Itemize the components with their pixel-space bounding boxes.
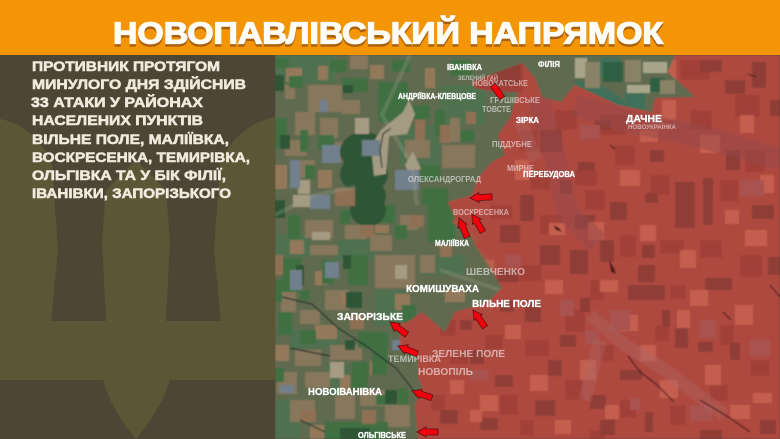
label: Новопіль: НОВОПІЛЬ [418, 367, 473, 378]
label: Товсте: ТОВСТЕ [482, 104, 511, 114]
label: Зелений Гай: ЗЕЛЕНИЙ ГАЙ [458, 74, 498, 82]
label: Вільне Поле: ВІЛЬНЕ ПОЛЕ [472, 299, 541, 310]
text block: attack summary [31, 59, 250, 201]
arrow: Олександроград direction [470, 192, 492, 203]
label: Новохатське: НОВОХАТСЬКЕ [472, 78, 528, 88]
label: Комишуваха: КОМИШУВАХА [406, 284, 479, 295]
label: Запорізьке: ЗАПОРІЗЬКЕ [337, 312, 403, 323]
header banner [0, 0, 780, 55]
label: Темирівка: ТЕМИРІВКА [388, 354, 441, 364]
label: Грушівське: ГРУШІВСЬКЕ [490, 95, 540, 105]
title: НОВОПАВЛІВСЬКИЙ НАПРЯМОК [113, 17, 663, 53]
text block: attack summary: ВІЛЬНЕ ПОЛЕ, МАЛІЇВКА, [32, 132, 229, 147]
label: Іванівка: ІВАНІВКА [447, 63, 482, 72]
text block: attack summary: МИНУЛОГО ДНЯ ЗДІЙСНИВ [32, 77, 246, 92]
label: Дачне: ДАЧНЕ [626, 114, 662, 125]
label: Новоукраїнка: НОВОУКРАЇНКА [628, 123, 676, 131]
label: Новоіванівка: НОВОІВАНІВКА [308, 387, 382, 398]
arrow: Темирівка [396, 341, 419, 359]
label: Перебудова: ПЕРЕБУДОВА [523, 169, 575, 179]
text block: attack summary: ПРОТИВНИК ПРОТЯГОМ [32, 59, 220, 74]
map: farmland west of the front line [275, 55, 780, 439]
text block: attack summary: 33 АТАКИ У РАЙОНАХ [31, 95, 203, 110]
map: occupied territory shaded red [400, 55, 780, 439]
label: Шевченко: ШЕВЧЕНКО [466, 267, 525, 278]
label: Мирне: МИРНЕ [507, 163, 534, 173]
label: Філія: ФІЛІЯ [538, 60, 560, 69]
text block: attack summary: ОЛЬГІВКА ТА У БІК ФІЛІЇ, [32, 168, 226, 183]
arrow: Ольгівське [417, 427, 438, 437]
text block: attack summary: ВОСКРЕСЕНКА, ТЕМИРІВКА, [32, 150, 250, 165]
label: Олександроград: ОЛЕКСАНДРОГРАД [408, 174, 481, 184]
panel: left sidebar [0, 55, 275, 439]
label: Малїївка: МАЛІЇВКА [435, 239, 469, 248]
arrow: Воскресенка east [468, 211, 487, 235]
arrow: Вільне Поле [469, 307, 489, 330]
label: Зірка: ЗІРКА [516, 115, 539, 125]
label: Андріївка-Клевцове: АНДРІЇВКА-КЛЕВЦОВЕ [398, 92, 477, 101]
text block: attack summary: НАСЕЛЕНИХ ПУНКТІВ [32, 113, 203, 128]
arrow: Запорізьке [387, 318, 410, 339]
title: НОВОПАВЛІВСЬКИЙ НАПРЯМОК [113, 14, 663, 50]
arrow: Новоіванівка [410, 386, 433, 403]
text block: attack summary: ІВАНІВКИ, ЗАПОРІЗЬКОГО [32, 186, 231, 201]
label: Воскресенка: ВОСКРЕСЕНКА [453, 207, 509, 217]
arrow: Воскресенка west [454, 216, 472, 239]
label: Зелене Поле: ЗЕЛЕНЕ ПОЛЕ [432, 349, 505, 360]
icon: trident emblem [0, 117, 275, 439]
panel: map [275, 55, 780, 439]
arrow: toward Новохатське [491, 83, 505, 100]
label: Піддубне: ПІДДУБНЕ [492, 139, 532, 149]
